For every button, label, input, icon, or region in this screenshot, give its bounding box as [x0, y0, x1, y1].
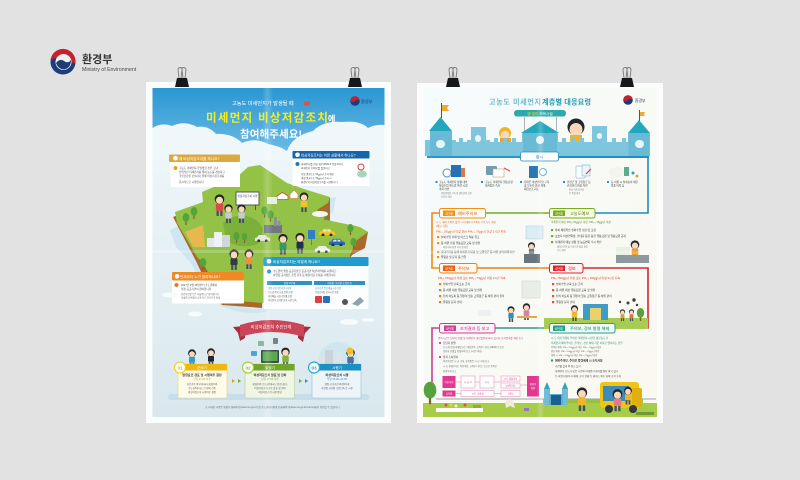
heading — [206, 99, 335, 140]
section: prediction: (예보 기준) — [436, 224, 448, 228]
section: report: 시·도 환경부서는 어린이집, 교육부 나이스 등으로 주의보 — [443, 364, 497, 368]
base band — [168, 394, 369, 400]
castle small — [544, 382, 568, 405]
column 1 — [436, 165, 472, 198]
heading — [489, 98, 591, 106]
column 4 — [563, 165, 591, 195]
flowchart: reporting: 취합 — [531, 386, 536, 390]
section: report: 조치결과 등 보고 — [460, 325, 489, 332]
panel: when: 내일 평균농도 50㎍/㎥ 초과 시 — [301, 176, 332, 180]
poster logo — [350, 96, 373, 106]
section: advisory: 주의보 — [458, 265, 470, 272]
section: warning: 4단계 — [555, 266, 563, 271]
panel: how: 비산먼지 공사장 공사 시간 단축 — [268, 298, 297, 302]
section: advisory lifted: 주의보 해제: PM₁₀ 100㎍/㎥ 이만, PM₂.₅ 35㎍/㎥ 이만 — [551, 345, 601, 349]
flowchart: reporting: 시·도 교육청 — [472, 392, 483, 396]
flow lines — [432, 157, 648, 393]
panel: how: 비상저감조치는 어떻게 하나요? — [273, 259, 320, 264]
column 2 — [481, 166, 513, 188]
fold lines — [262, 82, 273, 423]
flowchart: reporting: 시·군·구 — [464, 380, 472, 384]
notice board — [236, 192, 259, 210]
section: advisory: 천식 아토피 등 질환이 있는 고위험군 등·하원 관리 철저 — [443, 294, 505, 298]
panel: who: 2017년 2월 15일부터 수도권에서 — [181, 283, 218, 287]
characters — [215, 192, 308, 270]
footnote: ※ 자세한 사항은 환경부 홈페이지(www.me.go.kr) 및 수도권대기환경청 홈페이지(www.me.go.kr/mamo)에서 확인할 수 있습니다 — [205, 405, 340, 409]
section: high concentration — [550, 208, 649, 263]
step 1: 비상저감조치 시행여부 결정 — [188, 390, 216, 394]
panel: who: 미세먼지 특별법 시행 이후 전국으로 확대 — [181, 296, 220, 300]
panel: how: 건설공사장 공사시간 조정 — [315, 290, 338, 294]
poster logo: 환경부 — [635, 98, 646, 103]
heading: 참여해주세요! — [240, 128, 302, 140]
panel: how: 공공기관 운영 배출시설 조정 — [315, 286, 341, 290]
panel: why: 왜 비상저감조치를 하나요? — [179, 156, 219, 161]
section: report: 중복시군은 담당자 판별 및 미세먼지 경보발령에 따라 실시한 조치결과를 취합·보고 — [438, 336, 524, 340]
step 1: 요건충족 여부에 따라 환경부와 — [187, 382, 218, 386]
logo: Ministry of Environment: 환경부 — [82, 52, 112, 66]
section: advisory: 3단계 — [445, 266, 453, 271]
section: warning: PM₁₀ 300㎍/㎥ 이상 또는 PM₂.₅ 150㎍/㎥ 이상 2시간 지속 — [551, 276, 620, 280]
column 3: 휴대폰 비상연락망 구축 — [524, 180, 550, 184]
panel: who: 행정·공공기관이 참여합니다. — [181, 287, 212, 291]
section: advisory lifted — [550, 324, 623, 378]
step 3: 시행기 — [332, 365, 342, 370]
section: report: 환경부에 보고 — [443, 369, 456, 373]
heading: 계층별 대응요령 — [542, 98, 591, 106]
school bus and children — [577, 382, 642, 413]
panel: who: 언제부터 누가 참여하나요? — [180, 274, 220, 279]
clips: left poster — [175, 68, 362, 87]
section: advisory — [438, 264, 540, 322]
flowchart: reporting — [442, 376, 539, 396]
logo: Ministry of Environment — [50, 49, 137, 74]
panel: why — [169, 154, 240, 187]
section: report: 결과 조치결과 — [443, 355, 459, 359]
section: advisory lifted: 예비주의보, 주의보 발령해제 시 조치사항 — [555, 358, 603, 362]
poster: left — [146, 82, 391, 423]
section: warning: 등·하원 대상 행동요령 교육 및 실천 — [556, 288, 596, 292]
column 4: 등 특별 관리 — [569, 191, 580, 195]
column 2: 대처방안 숙지 — [485, 184, 501, 188]
section: report: 담당자 판별을 통일하여 보고 (시간 이내) — [443, 349, 482, 353]
step 1: 발령요건 검토 및 시행여부 결정 — [182, 372, 222, 377]
pill: target: 영·유아 보육시설 — [527, 111, 553, 116]
panel: why: 인위적인 미세먼지를 줄여 농도를 개선하고 — [179, 170, 225, 174]
fold lines — [536, 83, 545, 423]
section: report: 담당자 판별 — [443, 341, 456, 345]
section: prediction: 시·도 예비 주의보 발령 시 미세먼지 주의보 수준 농도 예상 — [436, 220, 497, 224]
panel: how: 수도권 주요 시설 운영 조정 — [268, 290, 293, 294]
panel: when — [292, 151, 370, 186]
panel: how: 수도권의 행정·공공기관은 공공기관 차량 2부제를 시행하고, — [273, 269, 337, 273]
column 1: 보호자 안내 — [441, 194, 452, 198]
section: advisory: PM₁₀ 150㎍/㎥ 이상 또는 PM₂.₅ 75㎍/㎥ 이상 2시간 지속 — [438, 276, 506, 280]
flowchart: reporting: 시·도 — [484, 380, 490, 384]
step 1: 당일 17:00 이후 — [193, 377, 211, 381]
flowchart: reporting: 어린이집 — [445, 380, 453, 384]
column 5: 물품 비치 등 — [611, 184, 625, 188]
flowchart: reporting: 유치원 — [446, 392, 452, 396]
poster logo: 환경부 — [361, 98, 373, 105]
section: report — [438, 324, 524, 373]
section: advisory: 알림장 문자 안내 — [443, 300, 462, 304]
panel: when: 환경부가 비상저감조치를 시행합니다 — [301, 180, 338, 184]
column 5 — [607, 167, 639, 188]
castle — [425, 103, 650, 158]
panel: how: 사업장·공사장 조업단축 — [327, 281, 352, 285]
step 2: 당일 17:00 이후 — [261, 377, 279, 381]
section: warning: 알림장 문자 안내 — [556, 300, 575, 304]
section: advisory lifted: 미세먼지 농도가 낮은 시간에 미세먼지 제거를 통한 환기 실시 — [555, 369, 618, 373]
flowchart: reporting: 교육부 — [507, 392, 514, 396]
section: advisory lifted: 6단계 — [555, 326, 563, 331]
column 4: 건강관리 대상 마련 — [567, 184, 588, 188]
section: prediction: 알림장 및 문자 등 전달 — [441, 255, 467, 259]
building — [207, 232, 230, 247]
arrows: step 2 to 3 — [299, 379, 308, 383]
section: advisory lifted: 미세먼지 예비주의보, 주의보, 경보 해제 기준 이하로 떨어지는 경우 — [551, 341, 623, 345]
panel: who: 민간사업장 등은 자율적으로 참여합니다 — [181, 292, 220, 296]
small clouds — [162, 292, 374, 325]
step 3 — [308, 342, 361, 398]
step 1: 수도권3개시도 간 협의 진행 — [188, 386, 216, 390]
logo: Ministry of Environment: Ministry of Environment — [82, 67, 137, 73]
panel: when: 비상저감조치는 어떤 상황에서 하나요? — [301, 152, 356, 158]
step 2: 비상저감조치 발표 및 전파 — [254, 372, 287, 377]
trees — [183, 206, 357, 270]
section: prediction: 예비주의보 — [458, 210, 477, 217]
column 1: 비상연락망 구축 및 행동요령 공유 — [441, 191, 472, 195]
section: prediction: 실외수업 자제 및 마스크 착용 권고 — [441, 235, 480, 239]
label: normal — [520, 152, 558, 161]
pill: target — [514, 110, 566, 116]
heading: 고농도 미세먼지가 발생될 때 — [232, 99, 294, 107]
panel: how: 행정·공공기관 차량 2부제 — [268, 286, 291, 290]
step 2: 비상저감조치 시행 알림 — [258, 390, 282, 394]
column 3: 및 보호자 안내 체계, — [524, 184, 546, 188]
arrows: step 1 to 2 — [232, 379, 241, 383]
section: high concentration: 야외 체험학습 실외수업 점검 및 조정 — [555, 228, 596, 232]
section: report: 어린이집은 시·군·구청, 유치원은 시·군 구에 보고 — [443, 359, 489, 363]
children on castle — [499, 118, 584, 144]
step 3: 익일 06:00~21:00 — [327, 377, 348, 381]
step 1: 01 — [177, 365, 183, 370]
section: advisory lifted: 경보 해제: PM₁₀ 150㎍/㎥ 이만, PM₂.₅ 75㎍/㎥ 이만 — [551, 349, 599, 353]
section: warning: 실외수업 단축 또는 금지 — [556, 282, 583, 286]
step 2: 02 — [245, 365, 251, 370]
panel: how — [264, 257, 368, 309]
poster logo — [623, 95, 646, 105]
heading: 에 — [328, 114, 335, 124]
section: advisory: 등·하원 대상 행동요령 교육 및 실천 — [443, 288, 483, 292]
section: high concentration: 고농도예보 — [570, 211, 589, 217]
panel: why: 국민건강을 보호하기 위해 비상저감조치를 — [179, 174, 225, 178]
section: warning — [544, 264, 648, 329]
panel: when: 당일 평균농도 50㎍/㎥ 초과 예상 — [301, 172, 335, 176]
column 1: 실내수업 매뉴얼 마련·시행 — [439, 184, 468, 188]
section: prediction: 비상 대처 요령 숙지 및 대응 — [443, 245, 468, 249]
flowchart: reporting: 시·도 담당부서 — [504, 376, 517, 380]
section: advisory lifted: 기간별 실내 외 청소 실시 — [555, 364, 581, 368]
panel: who — [172, 272, 244, 304]
step 3: 비상저감조치 시행 — [326, 372, 349, 377]
vehicles — [255, 229, 345, 253]
panel: when: 미세먼지 주의보를 발령하고 — [301, 166, 331, 170]
factory — [264, 217, 282, 233]
section: advisory lifted: 등·하원 담당부서 해제, 공기 전달 등 환자는 특수 회의 조치 조치 — [555, 374, 621, 378]
section: advisory lifted: 주의보, 경보 발령 해제 — [570, 325, 609, 332]
panel: how: 대기배출 시설 가동률 조정 — [268, 294, 292, 298]
heading: 미세먼지 비상저감조치 — [206, 110, 328, 124]
step 3: 사업장·공사장 조업단축 등 시행 — [321, 386, 353, 390]
section: high concentration: 에어코리아 및 스마트폰 앱을 통해 — [557, 244, 588, 248]
ribbon: stages title — [233, 320, 311, 342]
section: high concentration: 미세먼지 예보 상황 및 농도변화 수시 확인 — [555, 240, 602, 244]
flowchart: reporting: 환경부 — [530, 382, 537, 386]
column 4: 민감군 및 고위험군 등 — [567, 180, 591, 184]
section: high concentration: 2단계 — [555, 211, 563, 216]
step 2: 환경부와 수도권3개시도 인천·경기, — [253, 382, 288, 386]
panel: when: 미세먼지를 전한 경우(PM2.5 전일 16시) — [301, 162, 343, 166]
flowchart: reporting: 보건복지부 — [505, 384, 516, 388]
step 1 — [174, 348, 227, 398]
column 3 — [520, 166, 550, 191]
section: warning: 경보 — [568, 265, 576, 271]
section: report: 5단계 — [446, 326, 454, 331]
column 2: 고농도 미세먼지 행동요령 — [485, 180, 513, 184]
step 1: 준비기 — [197, 365, 207, 370]
sky header — [152, 88, 384, 417]
column 4: 천식·아토피 아동 — [569, 188, 584, 192]
section: advisory lifted: 해제 시: PM₁₀ 100㎍/㎥ 이만, PM₂.₅ 35㎍/㎥ 이만 — [551, 353, 597, 357]
heading: 고농도 미세먼지 — [489, 98, 541, 106]
step 3: 행정·공공기관 차량2부제 — [325, 382, 349, 386]
ground scene — [423, 382, 657, 417]
panel: how: 사업장·공사장은 조업 단축 등 배출저감 조치를 시행합니다. — [273, 273, 336, 277]
label: normal: 평시 — [536, 153, 543, 159]
panel: why: 고농도 미세먼지가 발생할 경우, 단기 — [179, 166, 219, 170]
section: high concentration: 농도 확인 — [557, 248, 566, 252]
panel: why: 한시적으로 시행합니다 — [179, 180, 204, 184]
step 3: 03 — [311, 365, 317, 370]
section: prediction — [436, 208, 543, 263]
step 2 — [242, 338, 294, 398]
section: advisory lifted: 시·도 대기국에서 주의보 미세먼지 시간당 평균농도가 — [551, 336, 609, 340]
section: prediction: 휴대기기를 통해 미세먼지 대응 및 고위험군 등·하원 관리대책 마련 — [441, 250, 515, 254]
ribbon: stages title: 비상저감조치 추진단계 — [251, 324, 291, 330]
column 5: 등·하원 시 실외놀이 제한 — [611, 180, 639, 184]
column 1: 계획 마련 — [439, 187, 450, 191]
clips: right poster — [446, 68, 634, 87]
section: prediction: PM₁₀ 150㎍/㎥ 이상 또는 PM₂.₅ 75㎍/㎥ 이상 2시간 지속 — [436, 228, 506, 234]
step 2: 발령기 — [265, 365, 275, 370]
section: prediction: 1단계 — [445, 211, 453, 216]
island map — [170, 165, 368, 313]
panel: how: 차량 2부제 — [284, 281, 296, 285]
houses — [277, 190, 298, 200]
section: prediction: 등·하원 전용 행동요령 교육 및 실천 — [441, 241, 481, 245]
step 2: 비상저감조치 공동 발표 및 전파 — [254, 386, 286, 390]
column 3: 체험보조 지도 — [524, 187, 540, 191]
section: warning: 천식 아토피 등 질환이 있는 고위험군 등·하원 관리 — [556, 294, 612, 298]
section: high concentration: 보호자 비상연락망, 안내문 등을 통한 행동요령 및 행동요령 공지 — [555, 234, 627, 238]
notice board: 비상저감조치 시행 — [238, 194, 258, 198]
column 1: 고농도 미세먼지 상황 대비 — [439, 180, 468, 184]
section: advisory: 실외수업 단축 또는 금지 — [443, 282, 470, 286]
section: report: 보고서(공문)이메일 또는 비상연락, 교육부 나이스(NEIS) 등으로 — [443, 345, 504, 349]
poster: right — [417, 83, 663, 423]
section: high concentration: 미세먼지 예보 PM₁₀ 81㎍/㎥ 이상, PM₂.₅ 36㎍/㎥ 이상 — [551, 220, 611, 224]
